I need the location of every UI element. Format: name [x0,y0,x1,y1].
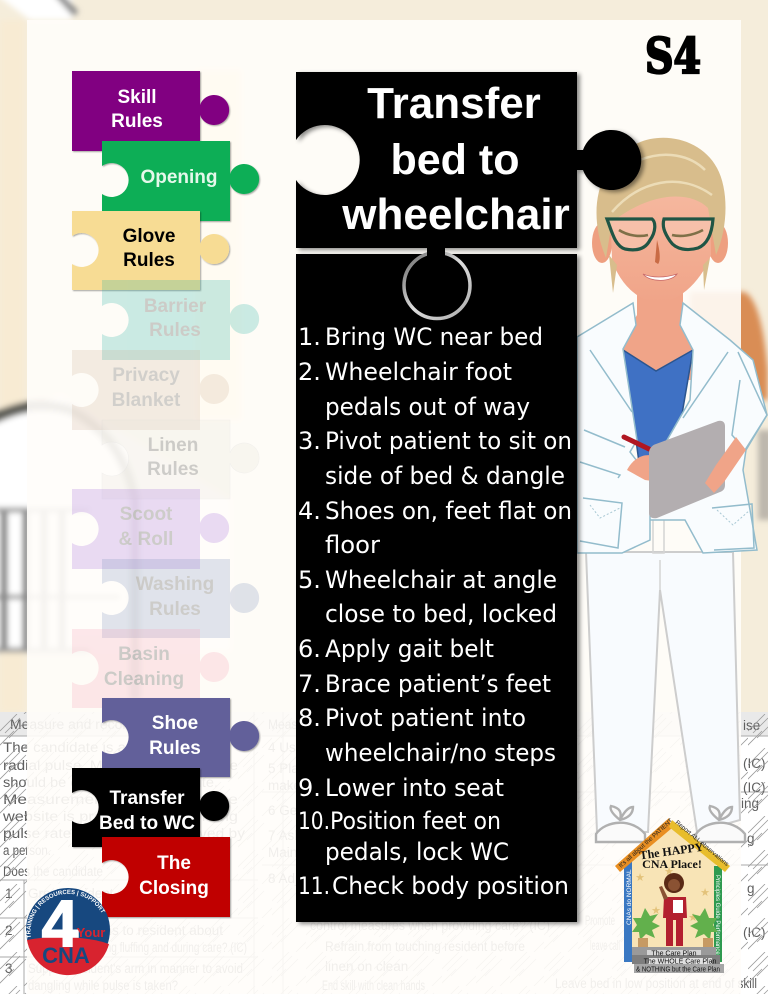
title puzzle panel [296,72,641,248]
piece: Glove Rules: Glove [123,226,175,247]
background: faint nursing skill table: dangling while pulse is taken? [28,978,178,993]
background: faint nursing skill table: leave call [590,938,620,953]
background: faint nursing skill table: (IC) [743,780,766,795]
piece: Glove Rules [72,211,229,290]
background: faint nursing skill table: End skill with clean hands [322,978,425,993]
steps list: 3. [298,427,321,455]
background: faint nursing skill table: Refrain from touching resident before [325,939,525,954]
glasses [607,219,713,250]
piece: The Closing [102,837,230,917]
background: faint nursing skill table: Maintain privacy, before ending [268,845,455,860]
steps list: 7. [298,670,321,698]
piece: Scoot & Roll [72,489,229,569]
background: faint nursing skill table: 1 [5,886,13,901]
background: faint nursing skill table: Measure and record radial pulse [10,717,210,732]
background: faint nursing skill table: ring fluffing and during care? (IC) [100,940,247,955]
piece: Barrier Rules [102,280,259,360]
background: faint nursing skill table: radial pulse. Measure for the pulse [3,758,238,773]
background: faint nursing skill table: website is provided for recording [2,809,238,824]
piece: Shoe Rules: Shoe [152,713,198,734]
stairs: & NOTHING but the Care Plan [636,966,720,974]
piece: Scoot & Roll: Scoot [120,504,173,525]
title text: bed to [391,136,519,184]
background: faint nursing skill table: 7 Ask resident about privacy [268,828,437,843]
roof left: It's all about the PATIENT [618,817,675,869]
stairs [632,947,724,974]
background: faint nursing skill table: 2 [5,923,13,938]
right wall band: Principles Guide Performance [714,875,720,955]
steps list: 8. [298,704,321,732]
piece: Skill Rules: Skill [117,87,157,108]
background: faint nursing skill table: 8 Adjust privacy (IC) [268,871,389,886]
piece: Glove Rules: Rules [123,250,175,271]
steps list: floor [325,531,380,559]
piece: Shoe Rules: Rules [149,738,201,759]
blue scrub shirt [623,350,693,470]
CNA figure [659,873,687,946]
background: faint nursing skill table: 6 Gently assess [268,803,364,818]
house title: The HAPPY [639,840,705,862]
steps list: pedals, lock WC [325,838,509,866]
plants [632,908,718,948]
piece: Transfer Bed to WC: Bed to WC [99,813,195,834]
steps list: close to bed, locked [325,600,557,628]
puzzle sidebar [72,71,259,917]
piece: Linen Rules: Linen [148,435,198,456]
background: faint nursing skill table: The candidate is asked to count a [3,740,229,755]
steps list: Bring WC near bed [325,323,543,351]
piece: Basin Cleaning: Basin [118,644,170,665]
background: faint nursing skill table [0,712,768,994]
background: faint nursing skill table: make bed, knock before entering [268,778,465,793]
background: faint nursing skill table: ise [743,718,760,733]
head and hair [592,138,728,303]
background: faint nursing skill table: 3 [5,961,13,976]
logo: 4 Your CNA: 4 [42,886,79,960]
steps list: Wheelchair foot [325,358,512,386]
steps list [298,323,572,900]
background: faint nursing skill table: 5 Place call light and lights up [268,761,446,776]
background: faint nursing skill table: 4 Use comfort [268,740,352,755]
steps list: Pivot patient to sit on [325,427,572,455]
background: faint nursing skill table: Explain actions to resident about [28,923,223,938]
steps list: 5. [298,566,321,594]
steps list: 9. [298,774,321,802]
background: faint nursing skill table: (IC) [743,925,766,940]
closed eyes [619,230,703,236]
steps list: Apply gait belt [325,635,494,663]
roof right: Report ALL observations [674,819,730,868]
piece: Washing Rules: Rules [149,599,201,620]
steps list: wheelchair/no steps [325,739,556,767]
piece: Barrier Rules: Rules [149,320,201,341]
background: faint nursing skill table: should be counted for full minute. [3,775,218,790]
logo: 4 Your CNA: Your [77,925,105,940]
background: faint nursing skill table: a person. [3,843,51,858]
steps list: Brace patient’s feet [325,670,551,698]
stars: ★ [688,912,698,924]
background: faint nursing skill table: (IC) [743,756,766,771]
left wall band [624,862,633,962]
stairs: The WHOLE Care Plan [644,958,716,966]
background: faint nursing skill table: g [747,881,755,896]
piece: Opening [102,141,259,221]
steps list: 4. [298,497,321,525]
piece: Basin Cleaning [72,629,229,708]
steps list: 2. [298,358,321,386]
background: faint nursing skill table: g [747,831,755,846]
piece: Shoe Rules [102,698,259,777]
clipboard [649,421,725,518]
background: faint nursing skill table: Measurement: For a pulse, the [3,792,238,807]
left wall band: CNAs do NORMAL [626,869,633,925]
S4 skill code: S4 [645,28,701,85]
title text: Transfer [367,79,541,128]
piece: Washing Rules: Washing [136,574,214,595]
logo: 4 Your CNA: TRAINING | RESOURCES | SUPPORT [26,890,106,938]
background: faint nursing skill table: Support resident's arm in manner to avoid [28,961,243,976]
steps list: Pivot patient into [325,704,526,732]
steps list: 10. [298,807,330,835]
smile [643,274,677,280]
piece: Linen Rules: Rules [147,459,199,480]
legs [586,516,740,832]
nurse illustration [577,138,767,842]
stars: ★ [700,887,710,899]
title text: wheelchair [341,190,570,239]
piece: Barrier Rules: Barrier [144,296,207,317]
steps list: Shoes on, feet flat on [325,497,572,525]
ring connector [404,246,470,318]
title text [341,79,570,239]
background: blurred window scene [0,0,768,712]
steps list: Position feet on [330,807,501,835]
house title: CNA Place! [642,857,702,871]
background: faint nursing skill table: Does the candidate [3,864,103,879]
right wall band [714,866,722,962]
pen [624,437,649,449]
logo: 4 Your CNA [26,886,110,976]
piece: Scoot & Roll: & Roll [119,529,173,550]
steps list: Lower into seat [325,774,504,802]
steps panel [296,246,577,922]
piece: Transfer Bed to WC: Transfer [110,788,185,809]
steps list: 1. [298,323,321,351]
piece: The Closing: Closing [139,878,209,899]
piece: Skill Rules: Rules [111,111,163,132]
piece: Opening: Opening [140,167,218,188]
steps list: Check body position [332,872,569,900]
left hand [627,455,660,482]
piece: Privacy Blanket: Blanket [112,390,181,411]
piece: Transfer Bed to WC [72,768,229,847]
steps list: Wheelchair at angle [325,566,557,594]
steps list: 11. [298,872,330,900]
shoes [596,806,745,842]
background: faint nursing skill table: ing [741,796,759,811]
stars: ★ [651,905,661,917]
white coat [577,303,767,553]
steps list: 6. [298,635,321,663]
background: faint nursing skill table: linen on clean [325,959,408,974]
logo: 4 Your CNA: CNA [42,943,90,968]
piece: Linen Rules [102,420,259,499]
piece: Washing Rules [102,559,259,638]
stairs: The Care Plan [651,950,697,958]
piece: Privacy Blanket [72,350,229,430]
background: faint nursing skill table: Greet resident [28,886,114,901]
background: faint nursing skill table: Measure resident's comfort and pulse [268,717,468,732]
neck and chest [620,285,697,380]
piece: Basin Cleaning: Cleaning [104,669,184,690]
nose [655,240,660,264]
steps list: side of bed & dangle [325,462,565,490]
right hand [705,437,746,493]
steps list: pedals out of way [325,393,530,421]
stars: ★ [635,872,645,884]
piece: The Closing: The [157,853,191,874]
logo: The Happy CNA Place house [615,817,730,974]
stars: ★ [664,866,674,878]
background: faint nursing skill table: pulse rate. The time is observed by [3,826,245,841]
piece: Skill Rules [72,71,229,151]
stars [635,866,710,924]
background: faint nursing skill table: Promote [585,913,615,928]
piece: Privacy Blanket: Privacy [112,365,180,386]
background: faint nursing skill table: control measures when providing care? (IC) [310,918,550,933]
